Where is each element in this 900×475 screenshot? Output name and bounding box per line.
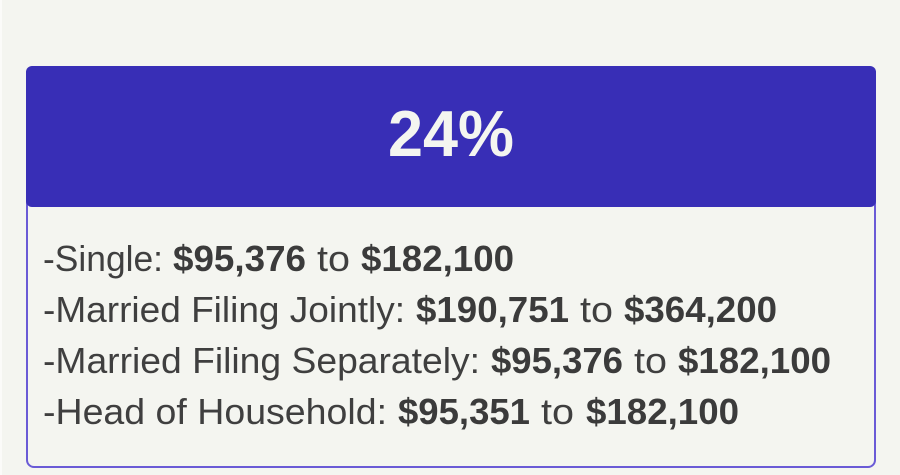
line: Single bbox=[43, 238, 514, 279]
line: Married Filing Jointly: -Married Filing Jointly: bbox=[43, 289, 405, 330]
text block: income ranges bbox=[43, 238, 831, 432]
line: Married Filing Jointly: $364,200 bbox=[624, 289, 777, 330]
line: Married Filing Separately bbox=[43, 340, 831, 381]
line: Single: $95,376 bbox=[173, 238, 306, 279]
line: Head of Household: $182,100 bbox=[586, 391, 739, 432]
line: Single: $182,100 bbox=[361, 238, 514, 279]
line: Head of Household: -Head of Household: bbox=[43, 391, 387, 432]
heading: 24%: 24% bbox=[388, 97, 514, 170]
line: Single: to bbox=[317, 238, 350, 279]
line: Married Filing Jointly bbox=[43, 289, 777, 330]
card outline bbox=[27, 67, 875, 467]
line: Married Filing Jointly: to bbox=[580, 289, 613, 330]
line: Married Filing Separately: -Married Filing Separately: bbox=[43, 340, 480, 381]
line: Married Filing Separately: to bbox=[634, 340, 667, 381]
line: Married Filing Jointly: $190,751 bbox=[416, 289, 569, 330]
line: Married Filing Separately: $95,376 bbox=[491, 340, 623, 381]
line: Single: -Single: bbox=[43, 238, 163, 279]
panel: 24% tax bracket card bbox=[26, 66, 876, 467]
line: Head of Household: to bbox=[541, 391, 574, 432]
line: Head of Household: $95,351 bbox=[398, 391, 530, 432]
line: Head of Household bbox=[43, 391, 739, 432]
header band bbox=[26, 66, 876, 207]
line: Married Filing Separately: $182,100 bbox=[678, 340, 831, 381]
